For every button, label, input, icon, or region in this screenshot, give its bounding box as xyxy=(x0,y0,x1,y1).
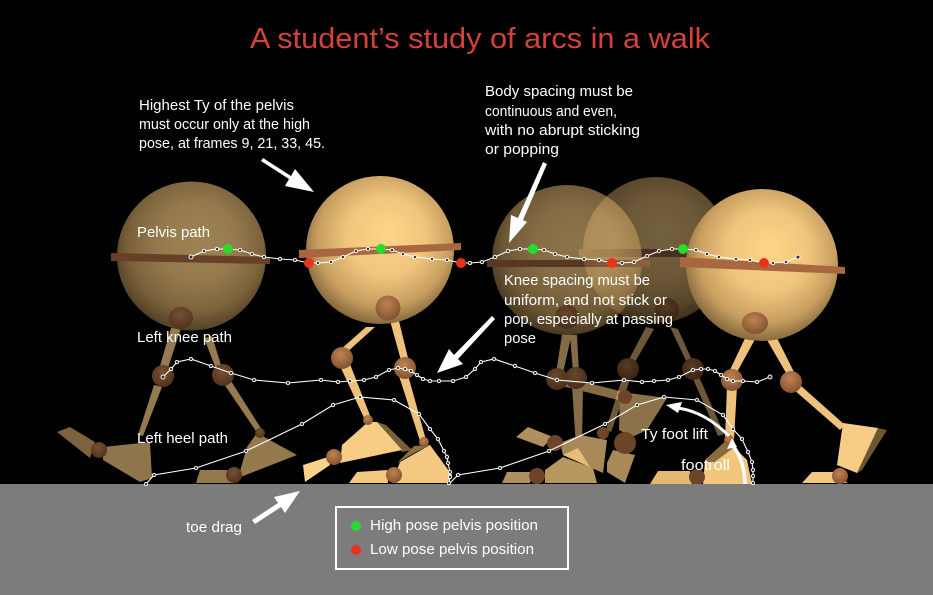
heel path keys xyxy=(144,395,755,486)
pelvis path xyxy=(189,244,800,268)
arrow: knee spacing xyxy=(437,316,495,373)
mid foot xyxy=(560,435,607,473)
hip joint xyxy=(376,296,400,320)
joints xyxy=(721,369,848,484)
legend: low pose: Low pose pelvis position xyxy=(370,541,534,558)
label: toe drag: toe drag xyxy=(186,519,242,536)
arrow: to high pose xyxy=(261,158,314,192)
joints xyxy=(546,367,587,390)
belt xyxy=(487,260,650,267)
left knee path xyxy=(161,357,772,385)
label: left heel path: Left heel path xyxy=(137,430,228,447)
left foot xyxy=(303,422,412,482)
legs xyxy=(138,328,262,436)
label: Ty foot lift: Ty foot lift xyxy=(641,426,709,443)
ground xyxy=(0,484,933,595)
feet of faded walkers xyxy=(502,390,667,484)
right foot xyxy=(196,433,297,483)
pelvis path keys xyxy=(189,247,800,265)
callout: highest Ty of the pelvis: pose, at frames 9, 21, 33, 45. xyxy=(139,135,325,152)
label: footroll: footroll xyxy=(681,457,730,474)
high pose markers xyxy=(223,244,688,254)
low pose markers xyxy=(304,258,769,268)
callout: knee spacing: pose xyxy=(504,330,536,347)
figure 4: faded walker behind xyxy=(579,177,729,436)
left foot xyxy=(57,427,152,482)
box toe xyxy=(607,450,635,483)
figure 5: bright walker xyxy=(650,189,887,485)
joints xyxy=(529,427,636,484)
callout: knee spacing: uniform, and not stick or xyxy=(504,292,667,309)
pelvis sphere xyxy=(117,182,266,330)
legs xyxy=(556,328,620,447)
curved arrow: footroll xyxy=(727,438,745,484)
front toe xyxy=(502,472,532,483)
legs xyxy=(725,332,845,440)
right foot xyxy=(802,423,887,483)
arrow: body spacing xyxy=(509,162,547,243)
raised foot xyxy=(619,392,667,437)
hip joint xyxy=(169,307,193,329)
callout: body spacing: Body spacing must be xyxy=(485,83,633,100)
hip joint xyxy=(742,312,768,334)
callout: highest Ty of the pelvis xyxy=(139,97,325,152)
pelvis sphere xyxy=(492,185,642,335)
joints xyxy=(617,358,704,380)
arrow: toe drag xyxy=(252,491,300,524)
callout: knee spacing: Knee spacing must be xyxy=(504,272,650,289)
callout: body spacing xyxy=(484,83,640,158)
belt xyxy=(680,257,845,274)
pelvis sphere xyxy=(686,189,838,341)
label: left knee path: Left knee path xyxy=(137,329,232,346)
title: A student’s study of arcs in a walk xyxy=(250,23,711,55)
hip joint xyxy=(655,298,679,322)
right foot xyxy=(349,445,452,483)
callout: body spacing: with no abrupt sticking xyxy=(484,122,640,139)
hip joint xyxy=(555,305,579,329)
legend: high pose: High pose pelvis position xyxy=(370,517,538,534)
joints xyxy=(91,364,265,483)
callout: highest Ty of the pelvis: Highest Ty of the pelvis xyxy=(139,97,294,114)
lower foot xyxy=(545,457,597,483)
belt xyxy=(111,253,270,264)
callout: body spacing: continuous and even, xyxy=(485,103,617,120)
figure 2: bright walker xyxy=(299,176,461,483)
knee path keys xyxy=(161,357,772,385)
legend xyxy=(336,507,568,569)
belt xyxy=(299,243,461,258)
back toe xyxy=(516,427,553,447)
callout: knee spacing: pop, especially at passing xyxy=(504,311,673,328)
curved arrow: Ty foot lift xyxy=(666,402,729,436)
legs xyxy=(340,317,426,441)
legs xyxy=(606,327,724,436)
belt xyxy=(579,249,723,257)
callout: highest Ty of the pelvis: must occur only at the high xyxy=(139,116,310,133)
callout: body spacing: or popping xyxy=(485,141,559,158)
pelvis sphere xyxy=(306,176,454,324)
left heel path xyxy=(144,395,755,486)
figure 3: faded walker xyxy=(487,185,650,447)
callout: knee spacing xyxy=(504,272,673,347)
label: pelvis path: Pelvis path xyxy=(137,224,210,241)
pelvis sphere xyxy=(583,177,729,323)
joints xyxy=(326,347,429,483)
left foot xyxy=(650,440,752,485)
figure 1: dim walker xyxy=(57,182,297,483)
